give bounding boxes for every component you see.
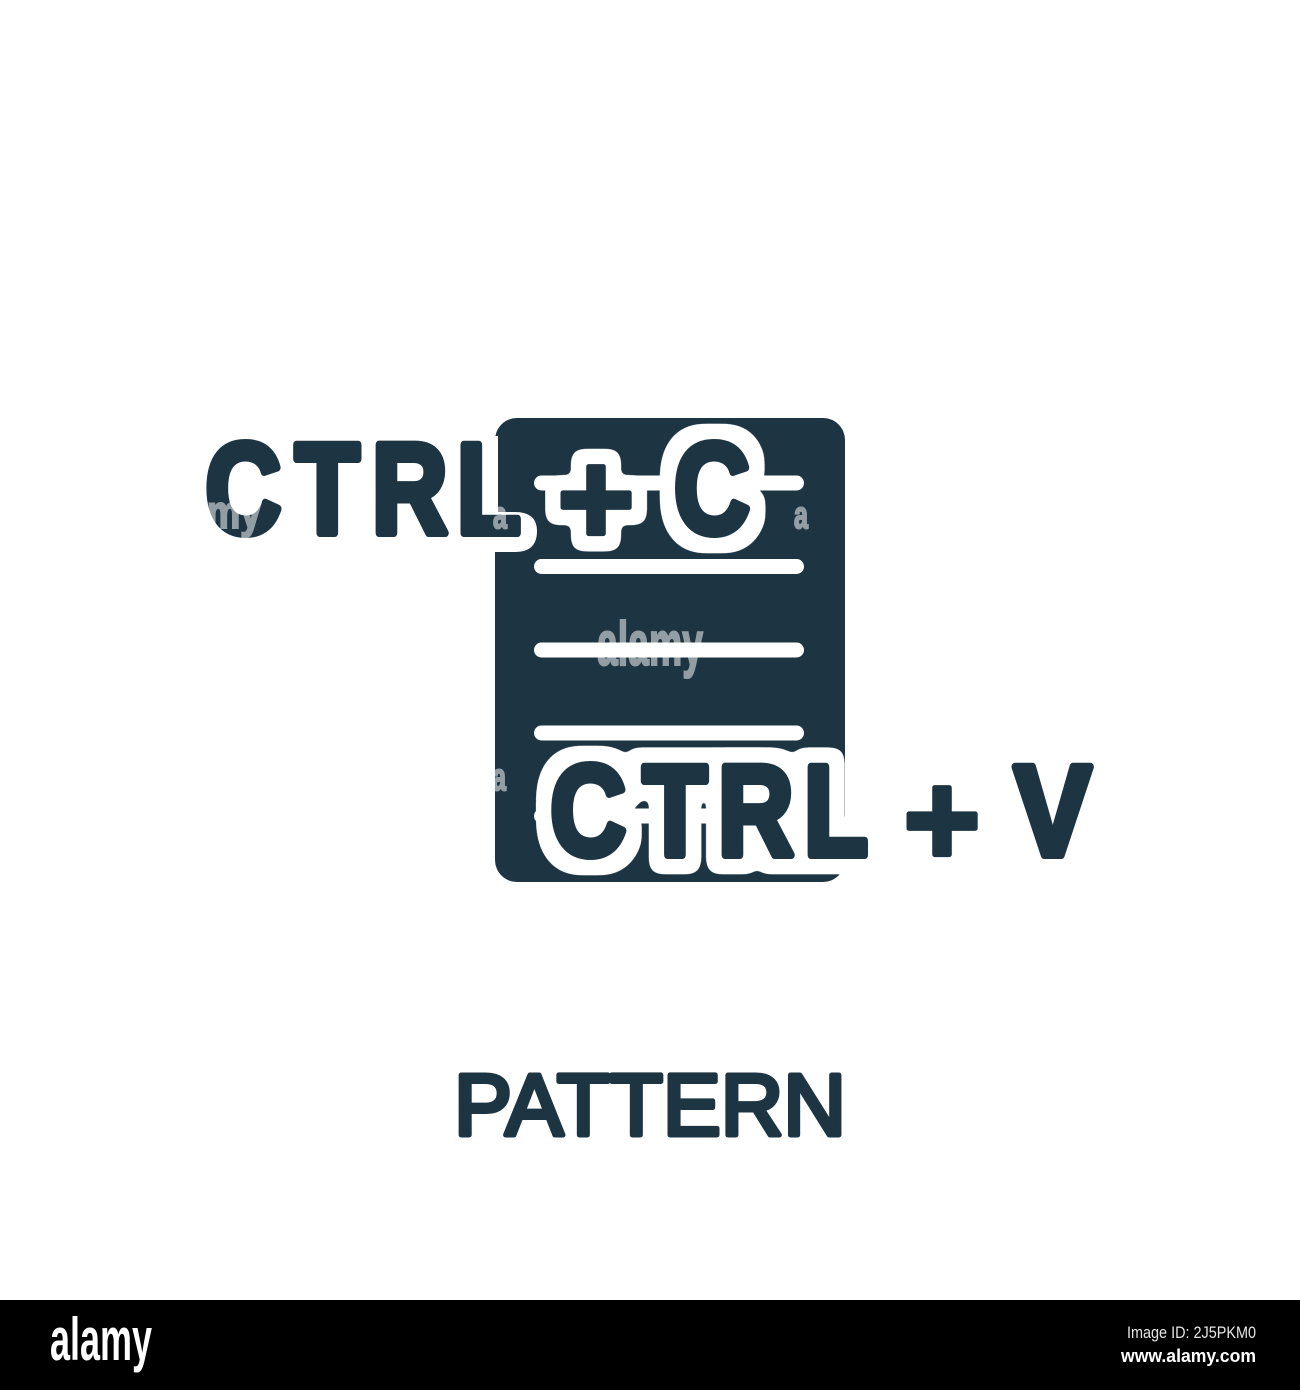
footer logo: alamy	[50, 1306, 152, 1373]
watermarks: a	[493, 495, 508, 537]
label: CTRL + V shortcut: V	[1014, 739, 1091, 882]
title: PATTERN: PATTERN	[454, 1057, 846, 1154]
watermarks: alamy	[597, 610, 703, 679]
label: CTRL + C shortcut	[205, 417, 750, 572]
watermarks: my	[207, 486, 261, 538]
label: CTRL + C shortcut: +	[557, 425, 635, 572]
watermarks: a	[794, 495, 809, 537]
label: CTRL + C shortcut: CTRL	[205, 417, 521, 560]
label: CTRL + V shortcut: +	[903, 746, 981, 893]
watermarks	[207, 486, 809, 799]
label: CTRL + V shortcut: CTRL	[550, 739, 868, 882]
watermarks: a	[492, 757, 507, 799]
icon: document with text lines	[495, 418, 845, 882]
label: CTRL + V shortcut	[550, 739, 1091, 893]
website: www.alamy.com	[1120, 1346, 1256, 1366]
label: CTRL + C shortcut: C	[674, 417, 750, 560]
image id: Image ID: 2J5PKM0	[1127, 1323, 1256, 1342]
footer bar	[0, 1300, 1300, 1390]
